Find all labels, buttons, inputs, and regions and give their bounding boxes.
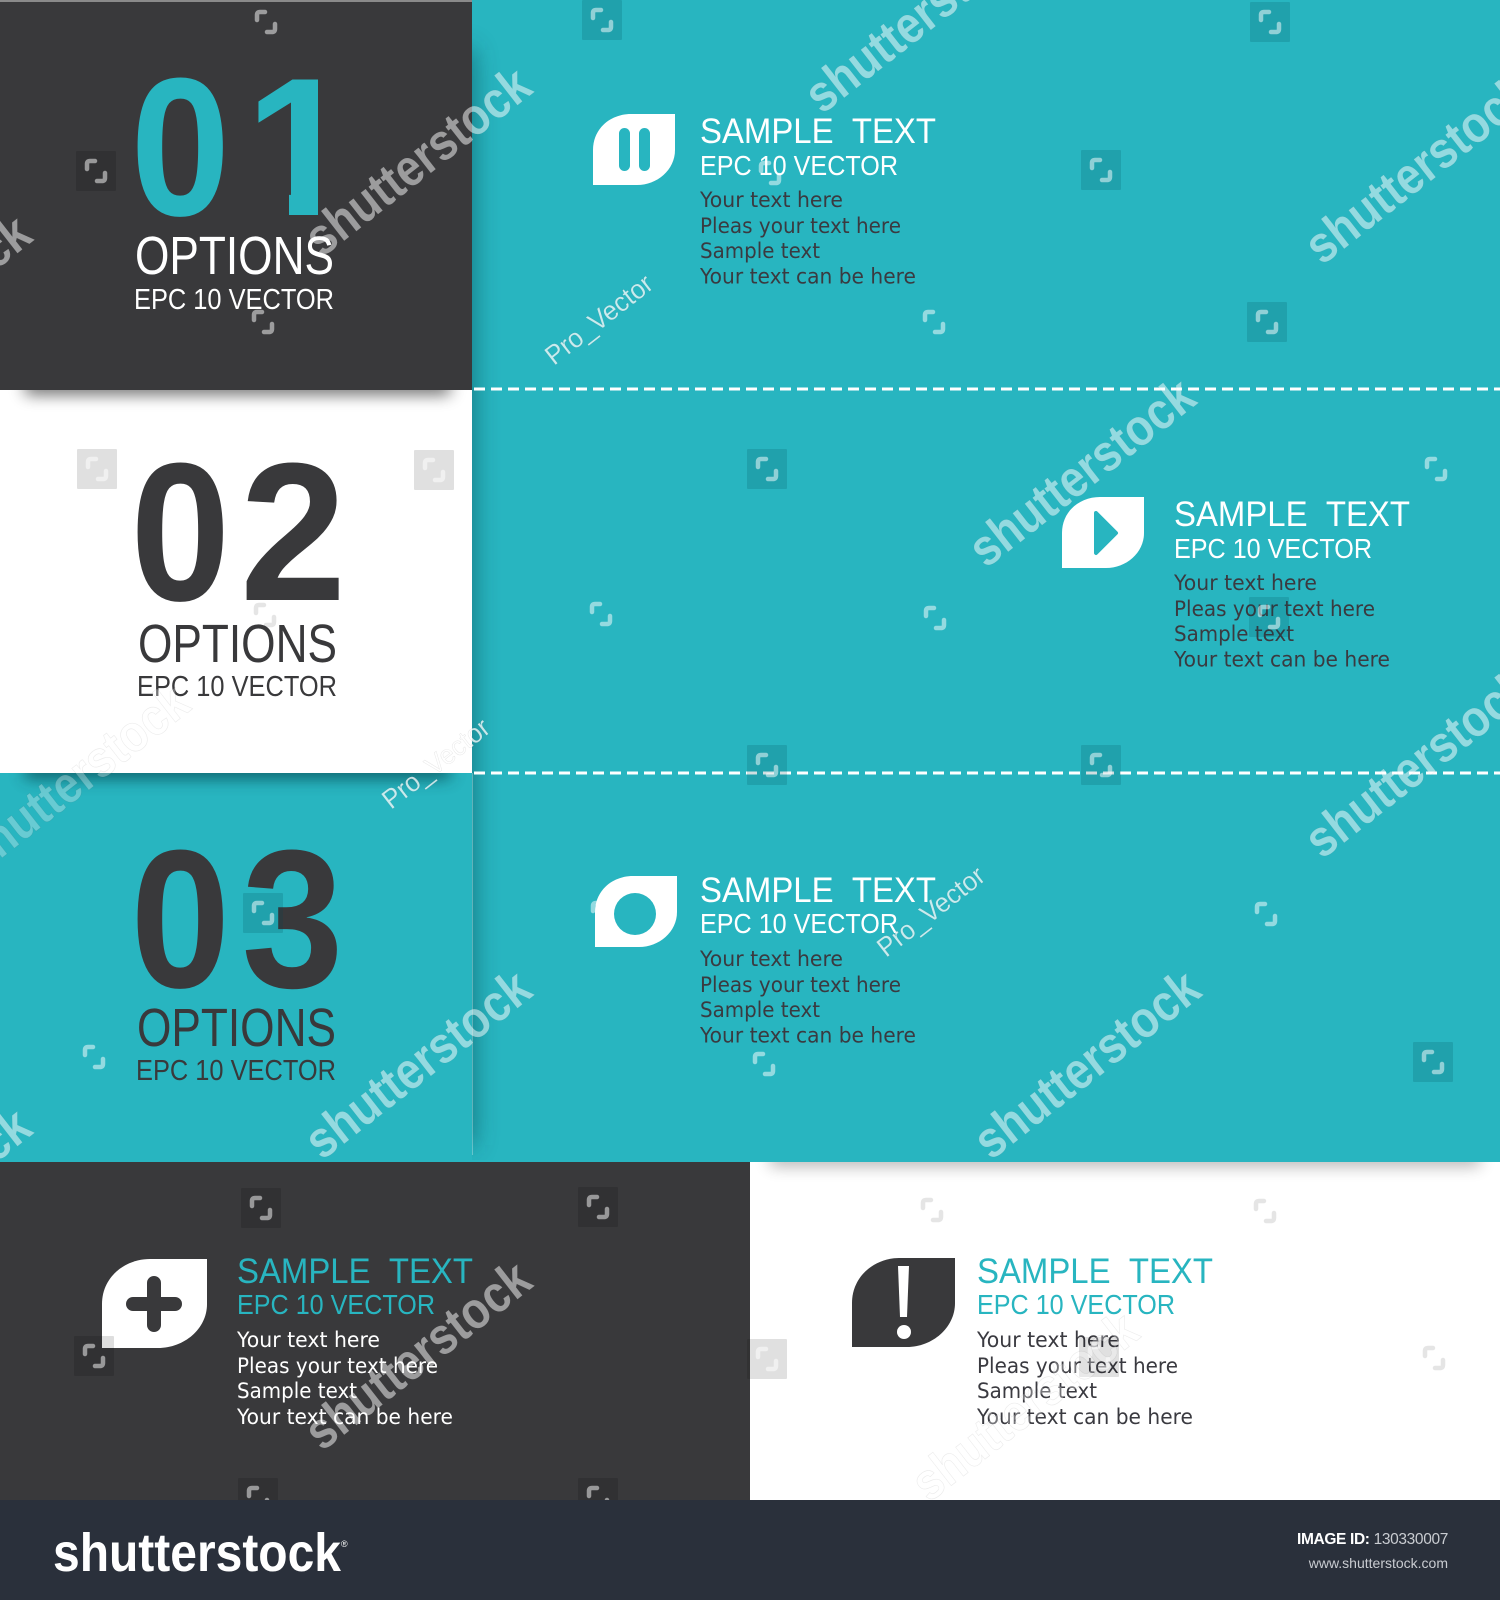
text: exclamation item copy: Pleas your text here (977, 1354, 1178, 1378)
shadow under dark panel (25, 378, 450, 394)
subheading: epc 2: EPC 10 VECTOR (137, 671, 337, 703)
block: pause item (593, 112, 936, 288)
watermark: diagonal wordmarks: shutterstock (294, 1249, 542, 1461)
watermark: diagonal wordmarks: shutterstock (294, 55, 542, 267)
block: record item (595, 871, 936, 1048)
text: pause item copy: Sample text (700, 239, 820, 263)
text: play item copy: EPC 10 VECTOR (1174, 533, 1372, 564)
heading: options 2: OPTIONS (138, 614, 337, 674)
text: play item copy: Sample text (1174, 622, 1294, 646)
icon: circle leaf (595, 876, 677, 947)
panel: bottom right white (763, 1162, 1487, 1424)
text: plus item copy: Pleas your text here (237, 1354, 438, 1378)
panel: bottom left dark (0, 1162, 750, 1500)
website: www.shutterstock.com (1308, 1555, 1448, 1571)
watermark: diagonal wordmarks: shutterstock (963, 958, 1211, 1170)
number 02: 2 (240, 422, 346, 643)
footer bar (0, 1500, 1500, 1600)
text: record item copy: Your text here (699, 947, 843, 971)
shadow: left edge of teal panel (472, 40, 488, 1154)
number 01: 0 (130, 37, 230, 257)
text: exclamation item copy: Your text can be here (976, 1405, 1193, 1429)
icon: pause leaf (593, 114, 675, 185)
text: record item copy: EPC 10 VECTOR (700, 908, 898, 939)
text: play item copy: Your text can be here (1173, 648, 1390, 672)
text: play item copy: Your text here (1173, 571, 1317, 595)
text: exclamation item copy: EPC 10 VECTOR (977, 1289, 1175, 1320)
watermark: diagonal wordmarks: Pro_Vector (871, 860, 991, 963)
text: pause item copy: Your text can be here (699, 264, 916, 288)
number 03 (130, 809, 343, 1029)
text: exclamation item copy: Your text here (976, 1328, 1120, 1352)
panel: teal background (472, 0, 1500, 1162)
text: play item copy (1173, 495, 1410, 672)
heading: options 3: OPTIONS (137, 998, 336, 1058)
panel: option 03 teal (0, 762, 473, 1162)
panel: option 02 white (14, 390, 460, 696)
icon: plus leaf (102, 1259, 207, 1348)
shadow under white panel (25, 762, 450, 778)
watermark: diagonal wordmarks: Pro_Vector (376, 712, 496, 815)
text: pause item copy: EPC 10 VECTOR (700, 150, 898, 181)
text: plus item copy: Sample text (237, 1379, 357, 1403)
text: record item copy: Pleas your text here (700, 973, 901, 997)
text: record item copy: Sample text (700, 998, 820, 1022)
subheading: epc 1: EPC 10 VECTOR (134, 284, 334, 316)
watermark: diagonal wordmarks: shutterstock (901, 1300, 1149, 1512)
block: play item (1062, 495, 1410, 672)
text: exclamation item copy: SAMPLE TEXT (977, 1252, 1213, 1291)
text: pause item copy: Pleas your text here (700, 214, 901, 238)
text: play item copy: SAMPLE TEXT (1174, 495, 1410, 534)
image id: IMAGE ID: 130330007 (1297, 1531, 1448, 1548)
number 01: 1 (245, 37, 355, 257)
text: play item copy: Pleas your text here (1174, 597, 1375, 621)
logo: shutterstock: shutterstock (53, 1523, 342, 1583)
text: exclamation item copy: Sample text (977, 1379, 1097, 1403)
text: plus item copy (236, 1252, 473, 1429)
shadow under teal panel (763, 1162, 1487, 1176)
number 03: 0 (130, 809, 230, 1029)
number 02: 0 (130, 422, 230, 642)
number 01 (138, 78, 318, 217)
text: plus item copy: Your text can be here (236, 1405, 453, 1429)
text: plus item copy: EPC 10 VECTOR (237, 1289, 435, 1320)
watermark: diagonal wordmarks: shutterstock (294, 958, 542, 1170)
text: record item copy: Your text can be here (699, 1024, 916, 1048)
watermark: diagonal wordmarks: Pro_Vector (539, 268, 659, 371)
subheading: epc 3: EPC 10 VECTOR (136, 1055, 336, 1087)
text: plus item copy: Your text here (236, 1328, 380, 1352)
text: record item copy (699, 871, 936, 1048)
number 02 (130, 422, 346, 643)
number 03: 3 (242, 810, 343, 1029)
text: plus item copy: SAMPLE TEXT (237, 1252, 473, 1291)
divider dashes (474, 389, 1500, 773)
panel: option 01 dark (0, 0, 472, 390)
text: pause item copy (699, 112, 936, 288)
text: record item copy: SAMPLE TEXT (700, 871, 936, 910)
logo registered mark: ® (341, 1539, 348, 1549)
watermark: diagonal wordmarks: shutterstock (958, 366, 1206, 578)
text: exclamation item copy (976, 1252, 1213, 1429)
heading: options 1: OPTIONS (135, 226, 334, 286)
text: pause item copy: SAMPLE TEXT (700, 112, 936, 151)
text: pause item copy: Your text here (699, 188, 843, 212)
icon: play leaf (1062, 497, 1144, 568)
icon: exclamation leaf (852, 1258, 955, 1347)
